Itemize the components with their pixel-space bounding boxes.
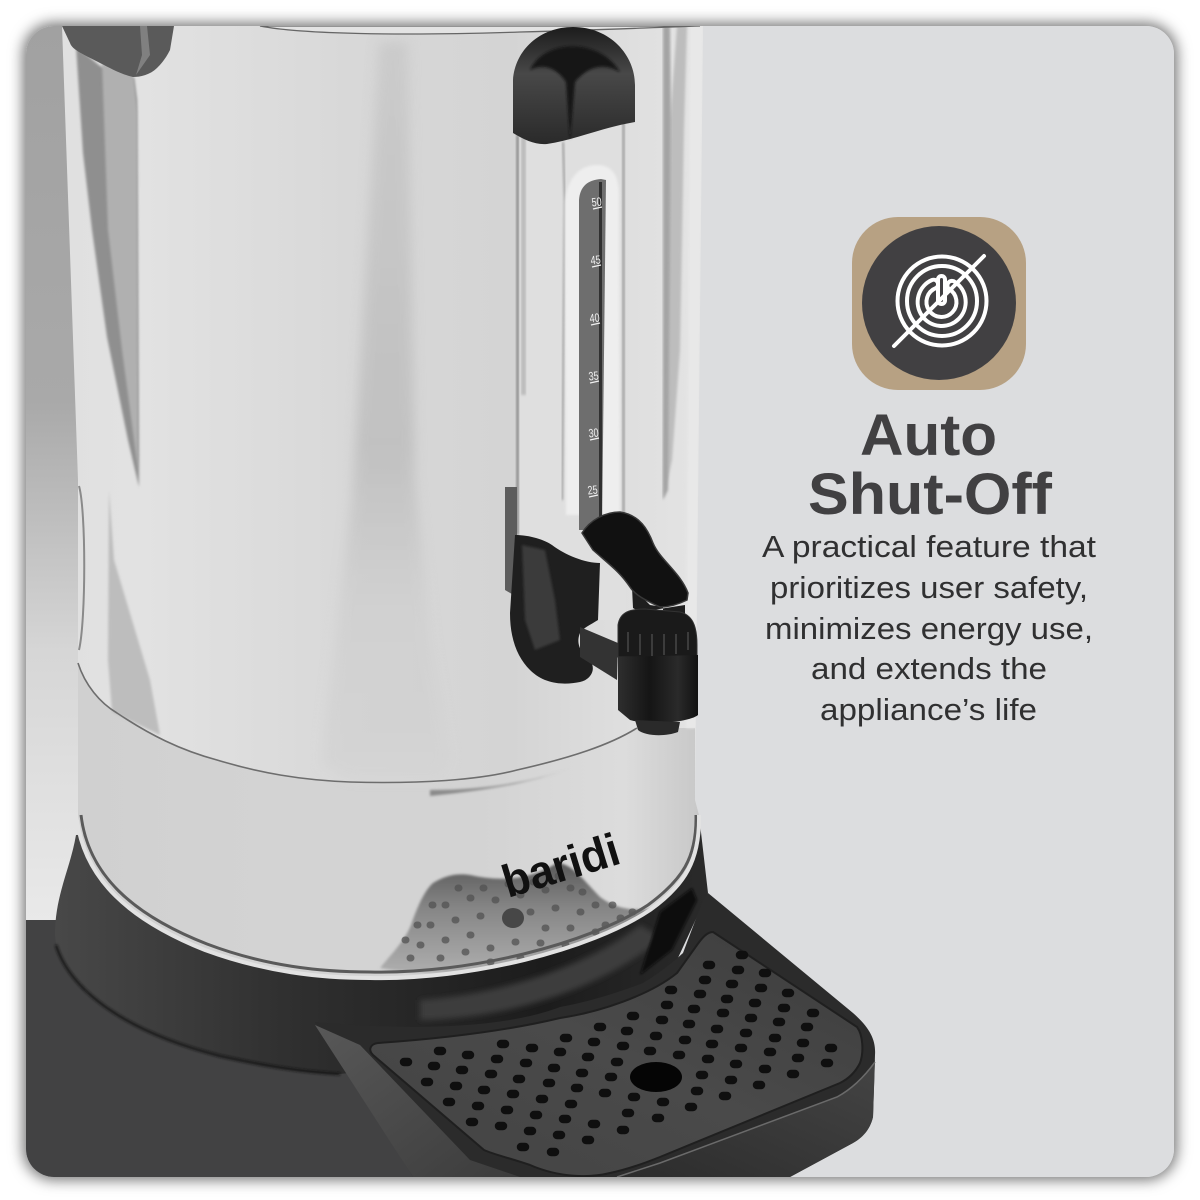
housing gloss	[522, 545, 560, 650]
tube mid shadow line	[562, 142, 565, 500]
left lower reflection	[108, 490, 160, 735]
description line 1: A practical feature that	[762, 529, 1096, 564]
description line 2: prioritizes user safety,	[770, 570, 1088, 605]
description line 5: appliance’s life	[820, 692, 1037, 727]
tap ribs	[628, 632, 688, 656]
scale numbers	[587, 195, 603, 498]
icon power symbol	[894, 256, 986, 346]
scale 30: 30	[588, 426, 600, 441]
dark counter surface	[26, 920, 413, 1177]
tray well	[370, 932, 862, 1176]
base glossy black band	[640, 888, 697, 975]
handle	[62, 26, 174, 77]
right tube edge	[622, 122, 625, 517]
handle highlight	[136, 26, 150, 75]
icon tile	[852, 217, 1026, 390]
description line 3: minimizes energy use,	[765, 611, 1093, 646]
tray perforations	[404, 955, 833, 1152]
lower steel band	[78, 663, 699, 978]
right side highlight	[686, 728, 695, 729]
left tube edge	[516, 135, 519, 535]
scale window surround	[565, 165, 620, 515]
spout pipe	[580, 627, 618, 680]
sight tube	[516, 124, 626, 540]
scale 25: 25	[587, 483, 599, 498]
base gloss reflection	[420, 925, 662, 1020]
lower rim highlight	[77, 815, 699, 978]
heading line 1: Auto	[860, 403, 997, 468]
scale 50: 50	[591, 195, 603, 210]
slash	[894, 256, 984, 346]
heading	[808, 403, 1053, 527]
tap collar	[618, 609, 697, 657]
tray drain hole	[630, 1062, 682, 1092]
brand logo: baridi	[496, 823, 626, 908]
drip tray	[315, 893, 875, 1177]
power arc outline	[918, 280, 966, 326]
plastic base	[55, 815, 708, 1074]
tap lower cylinder	[618, 655, 698, 723]
power bar outline	[938, 276, 945, 304]
steel body	[62, 26, 542, 780]
sight tube cap	[513, 27, 635, 144]
left tube inner edge	[521, 135, 526, 395]
tube glass	[520, 137, 542, 540]
lid shadow line	[260, 26, 700, 34]
feature icon: auto shut-off	[852, 217, 1026, 390]
icon disc	[862, 226, 1016, 380]
heading line 2: Shut-Off	[808, 462, 1053, 527]
left lighter reflection stripe	[102, 62, 138, 470]
reflected holes	[405, 876, 633, 962]
scale tick marks	[589, 207, 602, 497]
outer ring	[898, 256, 986, 346]
scale tube dark edge	[599, 182, 602, 527]
base bottom shadow edge	[56, 945, 340, 1074]
reflected drain hole	[502, 908, 524, 928]
band seam line	[78, 663, 637, 782]
coffee urn	[55, 26, 708, 1074]
spout housing	[510, 535, 600, 684]
scale 35: 35	[588, 369, 600, 384]
scale 45: 45	[590, 253, 602, 268]
body reflections	[76, 26, 703, 973]
background: light wall	[1148, 26, 1174, 1177]
lower rim dark line	[81, 815, 696, 972]
background: left wall gradient	[26, 26, 78, 920]
scale tube	[579, 179, 606, 530]
tap lever stem	[632, 587, 685, 620]
description line 4: and extends the	[811, 651, 1047, 686]
right side dark reflection	[667, 27, 688, 478]
seam secondary reflection	[428, 776, 542, 797]
tray front face	[617, 1060, 875, 1177]
cap dark crease	[530, 46, 620, 140]
right side stripes	[663, 26, 671, 500]
tray left face	[315, 1025, 520, 1177]
back mount	[505, 487, 517, 597]
tray body	[315, 893, 875, 1177]
inner ring	[907, 266, 977, 336]
tap lever	[582, 512, 688, 607]
left dark reflection	[76, 46, 139, 487]
scale 40: 40	[589, 311, 601, 326]
tray lip highlight	[617, 1062, 875, 1177]
central vertical reflection	[348, 44, 418, 596]
tap tip	[635, 720, 680, 735]
reflection of drip tray on steel	[380, 863, 660, 973]
left edge oval reflection	[79, 486, 84, 650]
description	[762, 529, 1096, 727]
